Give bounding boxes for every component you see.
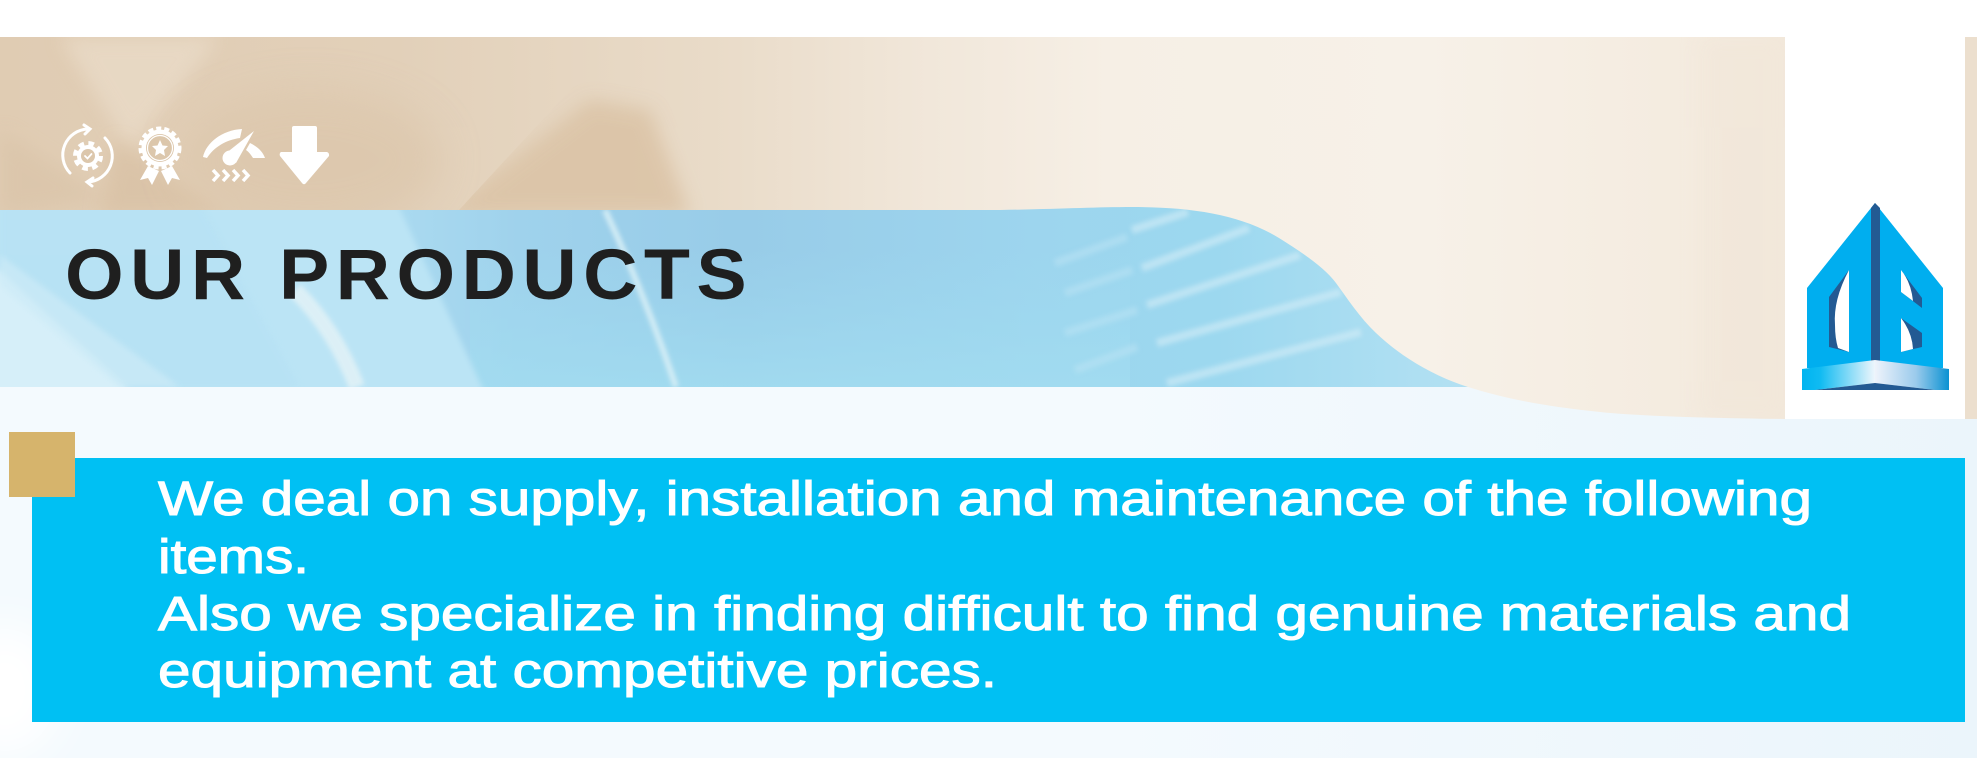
text block: intro <box>158 473 1851 698</box>
icon: speed gauge <box>203 129 265 181</box>
header band: beige photo <box>0 37 1977 419</box>
text block: intro: Also we specialize in finding difficult to find genuine materials and <box>158 588 1851 641</box>
header band: blue wave with light streaks <box>0 205 1480 400</box>
text block: intro: equipment at competitive prices. <box>158 645 997 698</box>
icon: down arrow <box>280 126 329 184</box>
panel: logo box <box>1785 37 1965 419</box>
text block: intro: We deal on supply, installation and maintenance of the following <box>158 473 1812 526</box>
panel: intro text box <box>32 458 1965 722</box>
icon: award rosette <box>140 128 180 185</box>
gold corner square <box>9 432 75 497</box>
icon: company logo <box>1802 203 1949 390</box>
text block: intro: items. <box>158 531 309 584</box>
icon: gear with rotating arrows <box>63 125 112 186</box>
title: OUR PRODUCTS <box>65 236 753 315</box>
